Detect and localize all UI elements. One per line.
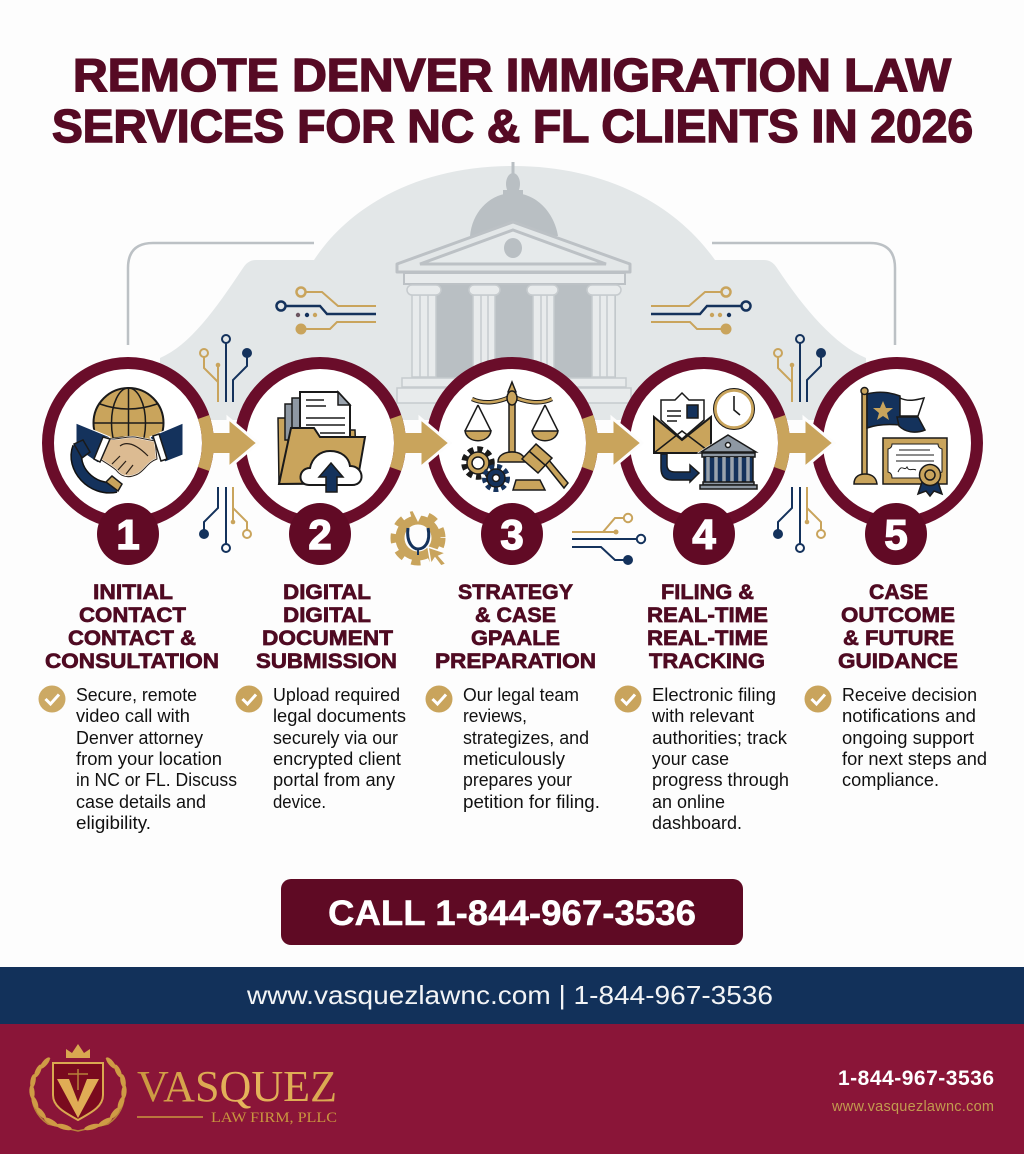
step 2 description: encrypted client [273,749,401,769]
step 1 description: from your location [76,749,222,769]
circuit: upper left horizontal [276,288,376,334]
number badge 5 [865,503,927,565]
circuit: between circles 4 and 5 [773,335,826,552]
step 1 heading: CONTACT [79,603,186,627]
step 2 heading: DOCUMENT [262,626,393,650]
number badge 3: 3 [500,511,524,558]
step 2 heading: SUBMISSION [256,649,397,673]
step 4 ring [624,363,784,565]
step 3 ring [432,363,592,565]
step 3 description: meticulously [463,749,565,769]
bracket line left [128,243,314,345]
bracket line right [712,243,895,345]
step 3 description: petition for filing. [463,792,600,812]
step 5 ring [817,363,977,565]
icon: envelope, clock, courthouse and arrow [654,388,757,489]
step 2 description: Upload required [273,685,400,705]
step 2 ring [240,363,400,565]
number badge 1: 1 [116,511,140,558]
step 3 description: prepares your [463,770,572,790]
step 2 description: legal documents [273,706,406,726]
step 1 heading: INITIAL [93,580,173,604]
number badge 5: 5 [884,511,908,558]
arrow 1 to 2 [205,418,258,468]
courthouse illustration [397,162,631,403]
step 3 heading: STRATEGY [458,580,573,604]
step 3 check icon [426,686,452,712]
step 4 heading: FILING & [661,580,754,604]
step 1 description: video call with [76,706,190,726]
step 5 description: notifications and [842,706,976,726]
circuit: between circles 1 and 2 [199,335,252,552]
footer phone: 1-844-967-3536 [838,1067,994,1090]
step 5 check icon [804,686,832,712]
step 5 heading: GUIDANCE [838,649,958,673]
step 3 heading: PREPARATION [435,649,596,673]
step 5 description: compliance. [842,770,939,790]
logo wordmark: VASQUEZ [137,1062,337,1111]
arrow 2 to 3 [397,418,450,468]
background silhouette [160,166,866,420]
logo subtitle: LAW FIRM, PLLC [211,1110,337,1126]
call to action button [281,879,743,945]
logo emblem [29,1044,127,1132]
step 4 description: your case [652,749,729,769]
step 1 heading [45,580,219,673]
step 2 description: device. [273,792,326,812]
step 4 description: an online [652,792,725,812]
step 2 description: securely via our [273,728,398,748]
step 2 heading: DIGITAL [283,603,371,627]
icon: globe, handshake and phone [74,388,183,491]
arrow 4 to 5 [781,418,834,468]
step 4 check icon [614,686,642,712]
step 5 description: ongoing support [842,728,974,748]
icon: gear with cursor [394,510,446,566]
contact bar: www.vasquezlawnc.com | 1-844-967-3536 [246,980,773,1010]
step 3 heading [435,580,596,673]
step 3 heading: & CASE [475,603,556,627]
number badge 4 [673,503,735,565]
step 1 heading: CONSULTATION [45,649,219,673]
step 4 description: Electronic filing [652,685,776,705]
step 3 description: reviews, [463,706,527,726]
icon: scales, gears and gavel [465,382,568,490]
step 4 description: progress through [652,770,789,790]
step 3 description [463,685,600,812]
circuit: upper right horizontal [651,288,750,334]
step 5 description [842,685,987,790]
step 1 check icon [38,686,66,712]
step 2 description [273,685,406,812]
step 2 description: portal from any [273,770,395,790]
title [52,49,973,152]
number badge 4: 4 [692,511,716,558]
title: SERVICES FOR NC & FL CLIENTS IN 2026 [52,100,973,152]
step 3 heading: GPAALE [471,626,560,650]
footer website: www.vasquezlawnc.com [831,1099,994,1115]
step 2 check icon [236,686,262,712]
step 1 description: Secure, remote [76,685,197,705]
circuit: between circles 3 and 4 [572,514,645,565]
step 3 description: strategizes, and [463,728,589,748]
step 1 description: in NC or FL. Discuss [76,770,237,790]
arrow 3 to 4 [589,418,642,468]
number badge 2: 2 [308,511,332,558]
contact bar [0,967,1024,1024]
step 4 heading: REAL-TIME [647,603,768,627]
step 1 heading: CONTACT & [68,626,196,650]
step 1 description: Denver attorney [76,728,203,748]
step 1 description [76,685,237,833]
step 4 description: dashboard. [652,813,742,833]
step 4 heading [647,580,768,673]
step 1 ring [48,363,208,565]
step 4 heading: REAL-TIME [647,626,768,650]
step 3 description: Our legal team [463,685,579,705]
call to action button: CALL 1-844-967-3536 [328,894,696,933]
number badge 2 [289,503,351,565]
icon: folder, documents and cloud upload [278,392,365,492]
number badge 3 [481,503,543,565]
icon: flag and certificate [854,388,947,496]
step 2 heading: DIGITAL [283,580,371,604]
title: REMOTE DENVER IMMIGRATION LAW [73,49,952,101]
step 5 heading: OUTCOME [841,603,955,627]
step 5 heading: & FUTURE [843,626,954,650]
step 1 description: case details and [76,792,206,812]
step 5 description: for next steps and [842,749,987,769]
step 4 description [651,685,789,833]
step 5 description: Receive decision [842,685,977,705]
number badge 1 [97,503,159,565]
step 2 heading [256,580,397,673]
step 5 heading [838,580,958,673]
step 4 heading: TRACKING [649,649,765,673]
step 5 heading: CASE [869,580,928,604]
footer [0,1024,1024,1154]
step 4 description: authorities; track [652,728,788,748]
step 4 description: with relevant [651,706,754,726]
step 1 description: eligibility. [76,813,151,833]
